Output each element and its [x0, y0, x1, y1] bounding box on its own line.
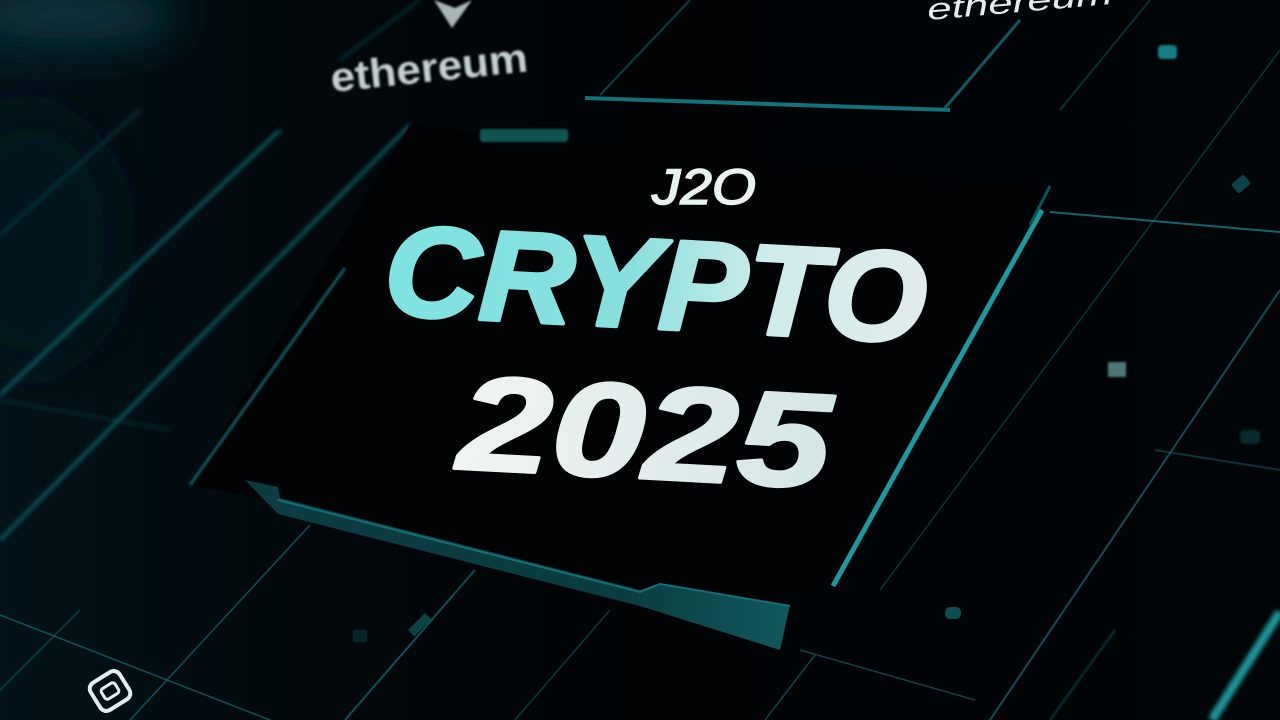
background circuit lines, blurred left	[0, 0, 420, 540]
top panel edge	[585, 98, 950, 110]
central panel	[190, 125, 1050, 650]
panel body	[190, 125, 1045, 600]
panel bottom highlight	[278, 500, 790, 606]
glowing nodes	[353, 45, 1260, 642]
bottom right bright edge	[1212, 612, 1280, 720]
panel corner edge	[1030, 186, 1050, 225]
logo: ethereum left: ethereum	[328, 35, 530, 101]
panel top tab	[480, 129, 568, 142]
title line: 2025: 2025	[451, 348, 838, 517]
small label: J2O	[651, 159, 756, 215]
background glow	[0, 0, 180, 370]
panel right edge	[833, 210, 1042, 586]
title	[381, 199, 930, 517]
panel bottom frame	[245, 480, 790, 650]
icon: ethereum mark	[434, 0, 472, 28]
title line: crypto: CRYPTO	[381, 199, 930, 370]
icon: wallet	[87, 668, 133, 714]
panel left edge	[190, 268, 345, 485]
